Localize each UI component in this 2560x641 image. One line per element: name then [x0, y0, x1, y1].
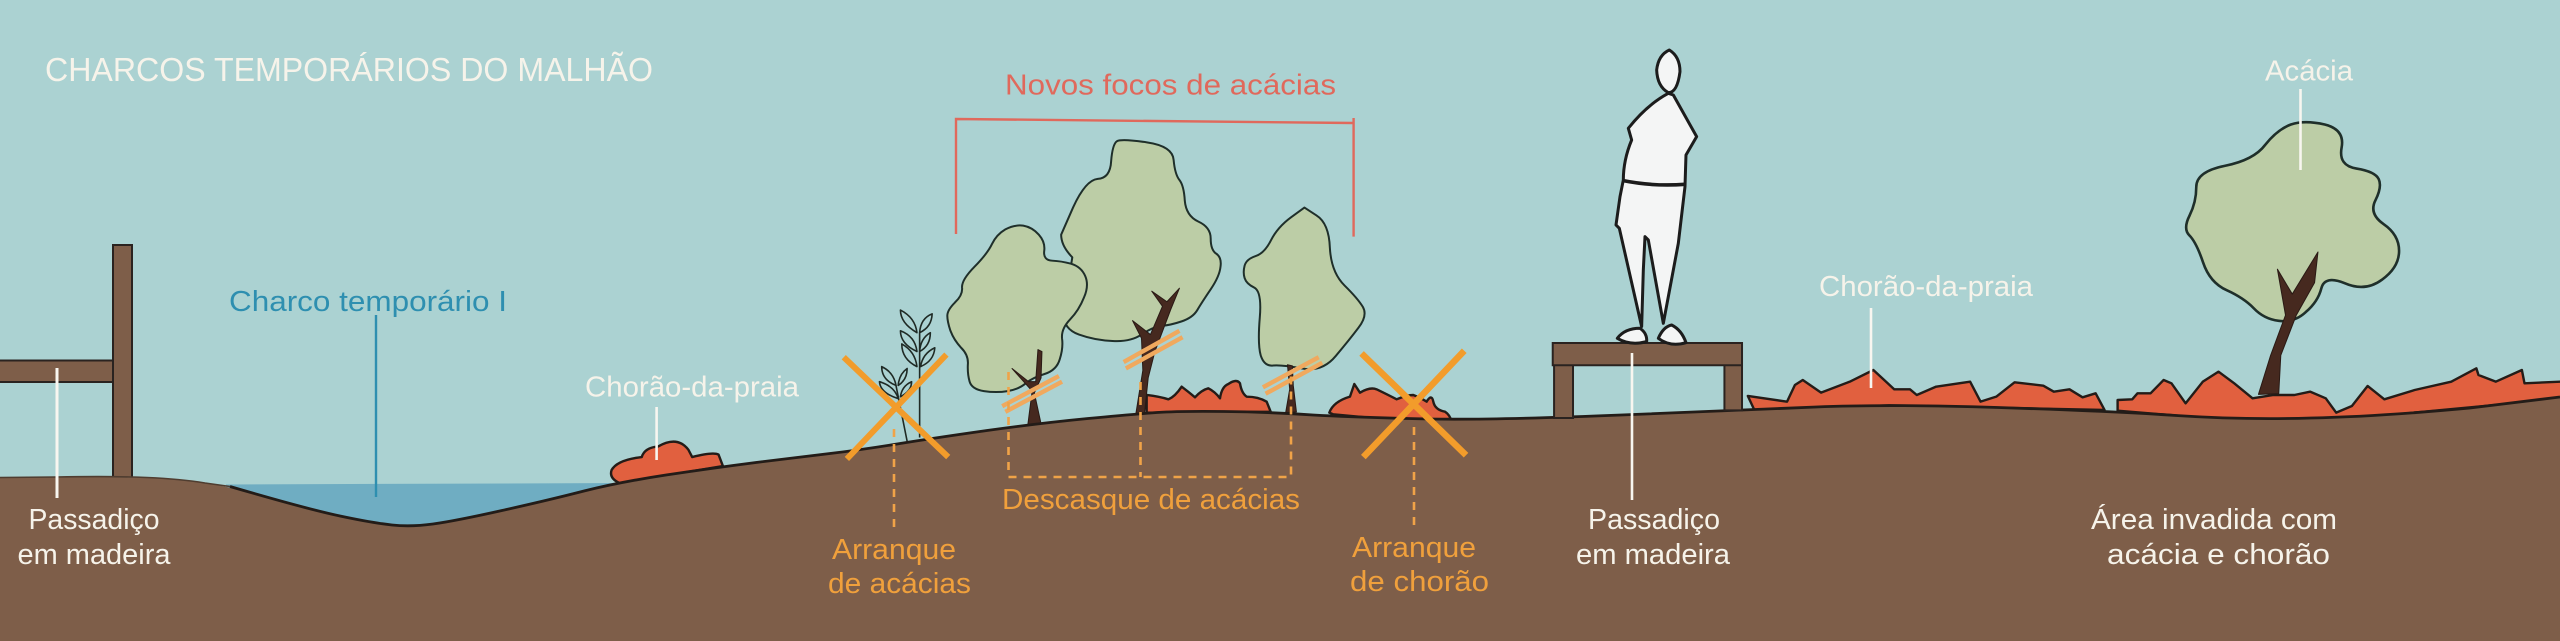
orange X and dashed leader: chorão removal — [1362, 351, 1466, 530]
tree trunk: middle acacia — [1133, 288, 1179, 415]
label: chorão removal: Arranque — [1352, 532, 1476, 564]
title: CHARCOS TEMPORÁRIOS DO MALHÃO — [45, 51, 653, 88]
label: right boardwalk: em madeira — [1576, 539, 1731, 571]
main acacia on the right — [2186, 122, 2399, 394]
label: acacia removal: de acácias — [828, 568, 971, 600]
person — [1616, 50, 1697, 344]
tree canopy: right acacia — [1244, 208, 1365, 369]
label: chorão slope: Chorão-da-praia — [585, 372, 800, 404]
label: invaded area: Área invadida com — [2091, 503, 2337, 536]
dashed bracket: bark peeling — [1008, 370, 1291, 477]
tree trunk: right acacia — [1286, 365, 1296, 413]
orange X and dashed leader: seedling removal — [844, 355, 948, 532]
label: right boardwalk — [1576, 504, 1731, 571]
long bushes: chorão on the right — [1748, 368, 2560, 421]
bracket: new acacia outbreaks — [956, 118, 1354, 237]
label: chorão right: Chorão-da-praia — [1819, 271, 2034, 303]
label: new acacia outbreaks: Novos focos de acácias — [1005, 70, 1336, 102]
label: invaded area: acácia e chorão — [2107, 539, 2330, 571]
central acacia group — [879, 140, 1365, 441]
white leader lines — [57, 89, 2300, 500]
label: acacia removal — [828, 534, 971, 600]
tree canopy: left acacia — [947, 225, 1087, 392]
label: chorão removal: de chorão — [1350, 566, 1489, 598]
label: chorão removal — [1350, 532, 1489, 598]
label: left boardwalk — [18, 504, 171, 571]
bushes between and beside the acacias — [1147, 381, 1452, 422]
bush: chorão between trees — [1147, 381, 1271, 413]
label: invaded area — [2091, 503, 2337, 571]
label: acacia removal: Arranque — [832, 534, 956, 566]
label: acacia: Acácia — [2265, 56, 2354, 88]
small bush: chorão on the slope — [611, 442, 723, 483]
ground — [0, 397, 2560, 641]
label: left boardwalk: Passadiço — [28, 504, 160, 536]
bush: chorão marked for removal — [1329, 384, 1452, 422]
bark peeling bands — [1002, 331, 1322, 412]
boardwalk deck and legs — [1553, 343, 1742, 418]
label: pond: Charco temporário I — [229, 286, 507, 318]
acacia seedlings — [879, 310, 935, 441]
label: right boardwalk: Passadiço — [1588, 504, 1720, 536]
left boardwalk — [0, 245, 132, 480]
tree canopy: middle acacia — [1061, 140, 1221, 341]
pond water — [226, 483, 630, 535]
tree trunk: left acacia — [1012, 350, 1042, 426]
label: bark peeling: Descasque de acácias — [1002, 484, 1300, 516]
label: left boardwalk: em madeira — [18, 539, 171, 571]
pond leader line — [375, 315, 377, 497]
